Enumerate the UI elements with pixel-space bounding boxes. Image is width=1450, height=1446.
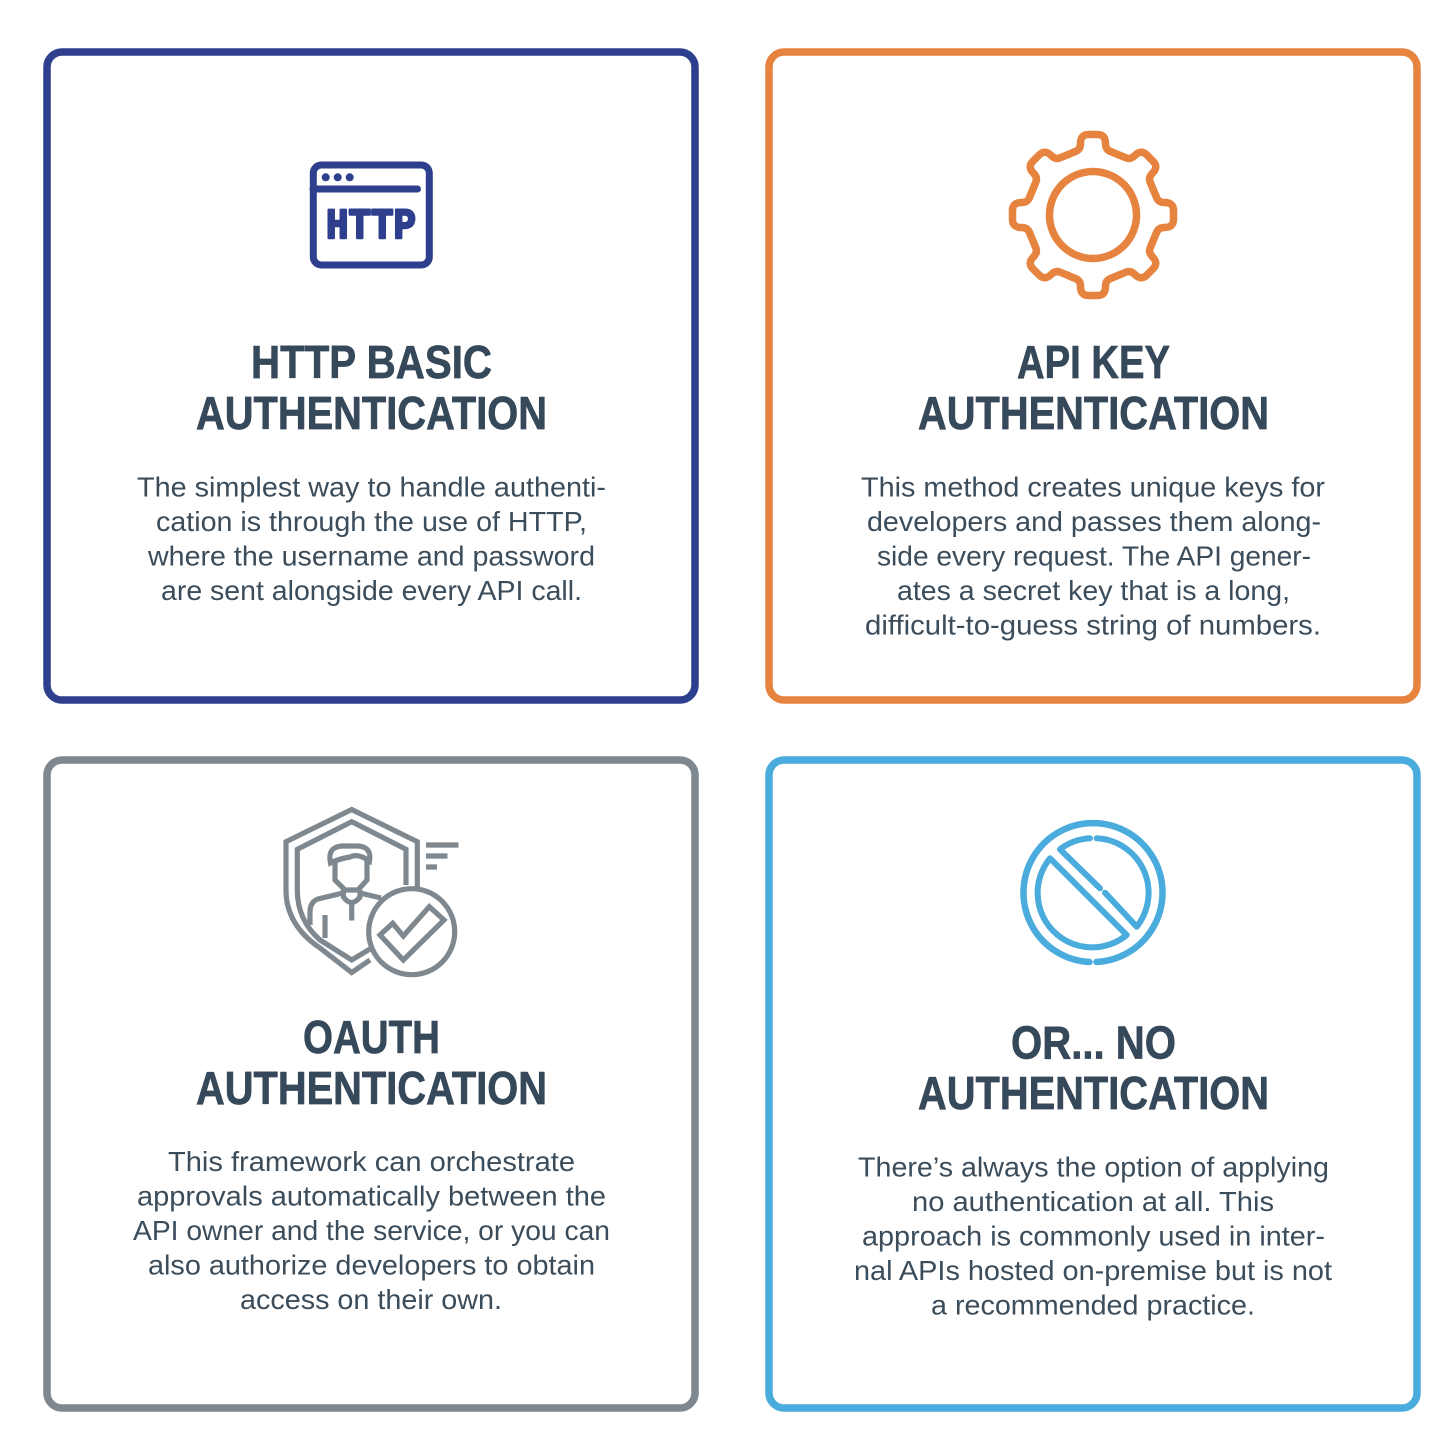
text block: API key description bbox=[861, 472, 1325, 641]
panel: API key authentication bbox=[769, 52, 1417, 700]
text block: no authentication description: approach is commonly used in inter- bbox=[862, 1220, 1325, 1252]
text block: API key description: ates a secret key that is a long, bbox=[897, 575, 1290, 606]
text block: HTTP basic description: where the username and password bbox=[147, 541, 595, 572]
heading: OAuth authentication: AUTHENTICATION bbox=[196, 1062, 547, 1114]
text block: HTTP basic description: cation is through the use of HTTP, bbox=[156, 506, 587, 537]
text block: no authentication description: There’s always the option of applying bbox=[858, 1152, 1329, 1182]
heading: no authentication: AUTHENTICATION bbox=[918, 1067, 1269, 1119]
text block: API key description: difficult-to-guess string of numbers. bbox=[865, 610, 1321, 641]
text block: OAuth description: This framework can orchestrate bbox=[168, 1146, 575, 1177]
text block: no authentication description: nal APIs hosted on-premise but is not bbox=[854, 1255, 1332, 1286]
panel: HTTP basic authentication bbox=[47, 52, 695, 700]
heading: HTTP basic authentication bbox=[196, 336, 547, 439]
text block: HTTP basic description bbox=[137, 472, 606, 606]
text block: HTTP basic description: The simplest way to handle authenti- bbox=[137, 472, 606, 503]
icon: shield with person and check mark bbox=[286, 810, 458, 975]
heading: no authentication: OR... NO bbox=[1011, 1016, 1176, 1068]
text block: API key description: side every request. The API gener- bbox=[877, 541, 1311, 572]
text block: API key description: developers and passes them along- bbox=[867, 506, 1321, 537]
heading: no authentication bbox=[918, 1016, 1269, 1119]
text block: API key description: This method creates unique keys for bbox=[861, 472, 1325, 503]
heading: OAuth authentication bbox=[196, 1011, 547, 1114]
heading: OAuth authentication: OAUTH bbox=[303, 1011, 440, 1063]
heading: API key authentication: API KEY bbox=[1017, 336, 1170, 388]
heading: HTTP basic authentication: HTTP BASIC bbox=[251, 336, 492, 388]
text block: OAuth description: access on their own. bbox=[240, 1284, 502, 1315]
text block: OAuth description: approvals automatically between the bbox=[137, 1180, 606, 1212]
heading: API key authentication bbox=[918, 336, 1269, 439]
text block: no authentication description: a recommended practice. bbox=[931, 1290, 1255, 1320]
panel: no authentication bbox=[769, 760, 1417, 1408]
text block: HTTP basic description: are sent alongside every API call. bbox=[161, 575, 582, 606]
icon: HTTP browser window: HTTP bbox=[326, 202, 416, 251]
text block: OAuth description: API owner and the service, or you can bbox=[133, 1215, 610, 1246]
heading: API key authentication: AUTHENTICATION bbox=[918, 387, 1269, 439]
text block: no authentication description bbox=[854, 1152, 1332, 1320]
text block: OAuth description bbox=[133, 1146, 610, 1315]
icon: prohibited sign bbox=[1024, 823, 1162, 962]
panel: OAuth authentication bbox=[47, 760, 695, 1408]
icon: HTTP browser window bbox=[313, 165, 429, 265]
text block: no authentication description: no authentication at all. This bbox=[912, 1186, 1274, 1217]
text block: OAuth description: also authorize developers to obtain bbox=[148, 1250, 595, 1280]
icon: gear bbox=[1012, 134, 1174, 296]
heading: HTTP basic authentication: AUTHENTICATION bbox=[196, 387, 547, 439]
